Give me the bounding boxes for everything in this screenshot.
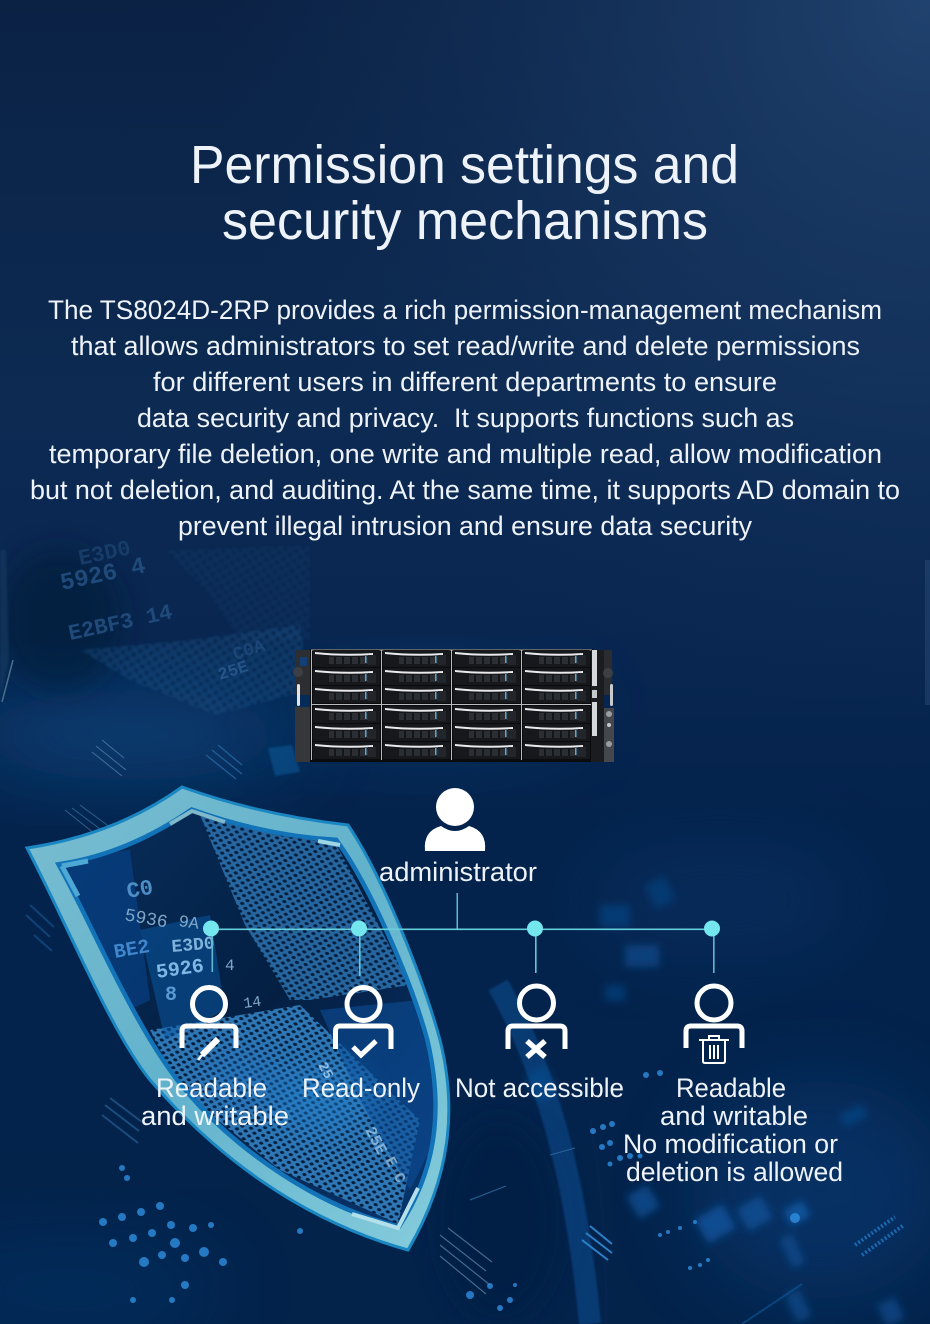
- label: readable and writable, no modification or deletion: deletion is allowed: [626, 1157, 843, 1187]
- icon: not accessible user: [508, 986, 565, 1057]
- shield data characters: 5926: [155, 955, 206, 985]
- server unit: [293, 649, 614, 762]
- shield data characters: 8: [165, 984, 177, 1007]
- background arc and circuit details: [26, 805, 904, 1324]
- shield data characters: 4: [225, 957, 235, 975]
- icon: readable and writable user: [182, 988, 236, 1060]
- shield inner brackets: [62, 861, 88, 896]
- description paragraph: data security and privacy. It supports functions such as: [137, 403, 794, 433]
- faint background data texture: E2BF3 14: [66, 600, 175, 647]
- shield inner panel: [62, 812, 433, 1224]
- permission tree connectors: [203, 893, 720, 976]
- label: readable and writable, no modification or deletion: No modification or: [623, 1129, 838, 1159]
- shield data characters: C0: [125, 876, 155, 905]
- scattered glowing dots: [99, 1070, 800, 1311]
- faint background data texture: C0A: [231, 637, 268, 666]
- faint background data texture: [0, 536, 930, 779]
- shield data characters: 14: [242, 994, 263, 1013]
- icon: administrator: [425, 788, 485, 851]
- shield data characters: [112, 876, 408, 1186]
- title: [190, 135, 739, 251]
- faint background data texture: 5926 4: [58, 553, 148, 598]
- faint background data texture: 25E: [216, 658, 251, 686]
- label: read-only: Read-only: [302, 1073, 420, 1103]
- label: readable and writable, no modification or deletion: Readable: [676, 1073, 786, 1103]
- administrator label: administrator: [379, 857, 537, 887]
- icon: read-only user: [336, 988, 391, 1055]
- label: readable and writable: and writable: [141, 1101, 289, 1131]
- shield data characters: 9A: [177, 913, 201, 935]
- shield data characters: 5936: [123, 906, 169, 933]
- shield data characters: BE2: [112, 936, 152, 965]
- description paragraph: for different users in different departments to ensure: [153, 367, 777, 397]
- blurred circuit tiles: [524, 876, 905, 1324]
- description paragraph: prevent illegal intrusion and ensure data security: [178, 511, 752, 541]
- shield data characters: 25E: [361, 1124, 390, 1158]
- label: readable and writable: [141, 1073, 289, 1131]
- description paragraph: that allows administrators to set read/write and delete permissions: [71, 331, 860, 361]
- shield: [27, 787, 460, 1260]
- title: Permission settings and: [190, 135, 739, 195]
- shield data characters: E3D0: [171, 934, 216, 958]
- description paragraph: The TS8024D-2RP provides a rich permission-management mechanism: [48, 295, 882, 325]
- left ear: [293, 650, 310, 762]
- label: not accessible: Not accessible: [455, 1073, 624, 1103]
- drive bays: [313, 650, 590, 759]
- description paragraph: temporary file deletion, one write and multiple read, allow modification: [49, 439, 882, 469]
- icon: delete-restricted user: [686, 986, 742, 1063]
- shield data characters: 25: [314, 1060, 336, 1082]
- right ear and control panel: [591, 650, 614, 762]
- label: readable and writable, no modification or deletion: [623, 1073, 843, 1187]
- faint background data texture: E3D0: [76, 536, 133, 572]
- shield outer frame: [27, 787, 449, 1250]
- shield data characters: E C: [381, 1154, 408, 1186]
- description paragraph: but not deletion, and auditing. At the same time, it supports AD domain to: [30, 475, 900, 505]
- description paragraph: [30, 295, 900, 541]
- chassis: [310, 649, 593, 762]
- title: security mechanisms: [222, 191, 708, 251]
- label: readable and writable: Readable: [156, 1073, 267, 1103]
- label: readable and writable, no modification or deletion: and writable: [660, 1101, 808, 1131]
